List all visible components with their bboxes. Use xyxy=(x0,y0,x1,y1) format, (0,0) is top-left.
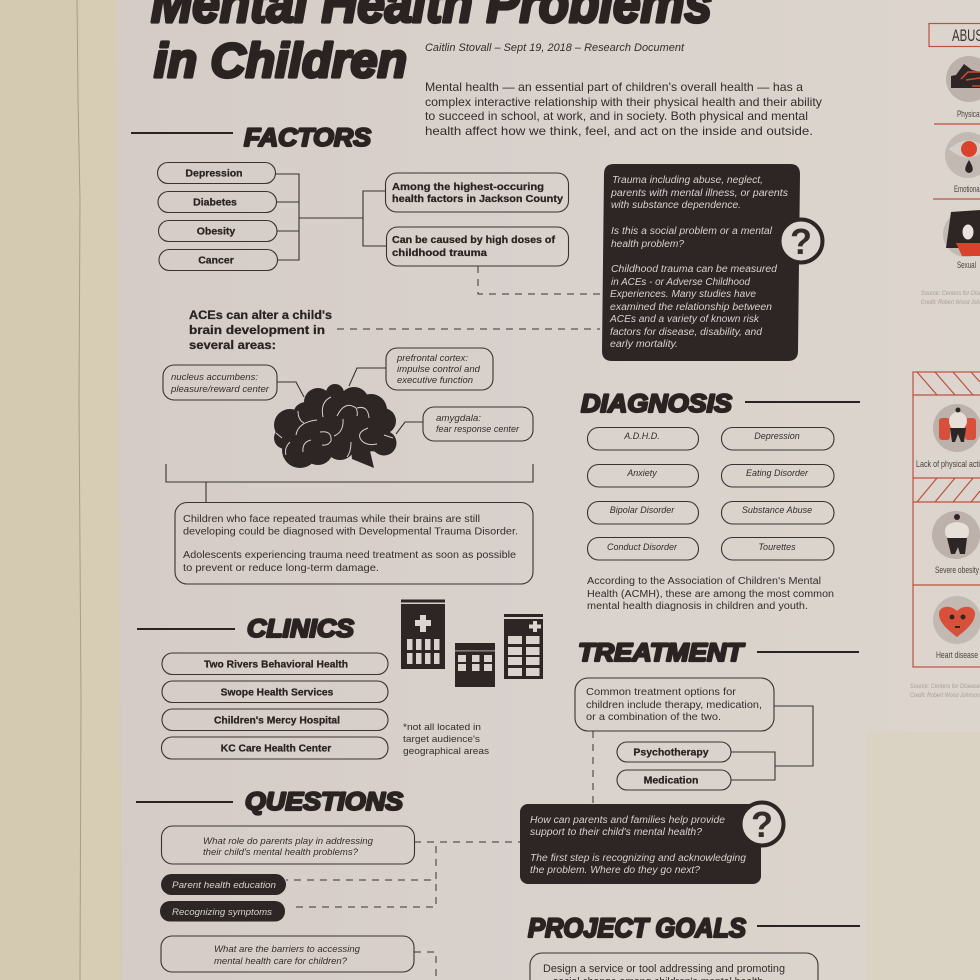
panel: trauma: examined the relationship between xyxy=(610,302,772,313)
factor pills: Depression xyxy=(185,168,243,180)
intro paragraph: health affect how we think, feel, and act on the inside and outside. xyxy=(425,124,813,138)
icon: physical abuse xyxy=(946,56,980,102)
brain label: nucleus accumbens: nucleus accumbens: xyxy=(171,372,258,382)
lower right wall patch xyxy=(866,732,980,980)
diagnosis pills: Conduct Disorder xyxy=(607,542,678,552)
treatment pills: Medication xyxy=(644,774,698,786)
clinic pills: Two Rivers Behavioral Health xyxy=(204,660,348,670)
diagnosis pills: A.D.H.D. xyxy=(623,431,660,441)
panel: developmental trauma xyxy=(175,502,533,584)
panel: trauma: health problem? xyxy=(611,239,685,250)
brain label: amygdala: fear response center xyxy=(436,424,520,434)
treatment connectors xyxy=(731,706,813,780)
diagnosis note xyxy=(587,576,834,612)
diagnosis pills: Bipolar Disorder xyxy=(610,505,675,515)
pill: recognizing symptoms: Recognizing symptoms xyxy=(172,907,272,918)
clinics footnote xyxy=(403,722,489,757)
icon: building large xyxy=(401,600,445,669)
panel: trauma: with substance dependence. xyxy=(611,200,741,211)
diagnosis pills: Tourettes xyxy=(758,542,796,552)
diagnosis pills: Depression xyxy=(754,431,800,441)
treatment description: Common treatment options for xyxy=(586,687,737,698)
intro paragraph: Mental health — an essential part of children's overall health — has a xyxy=(425,80,803,94)
icon: question mark: ? xyxy=(790,221,812,262)
bracket xyxy=(166,464,533,503)
brain label: amygdala xyxy=(396,407,533,441)
icon: question mark xyxy=(740,802,784,846)
panel: trauma: Is this a social problem or a mental xyxy=(611,226,773,237)
icon: question mark xyxy=(780,220,822,262)
icon: building small xyxy=(455,643,495,687)
callout: childhood trauma: Can be caused by high doses of xyxy=(392,235,556,246)
icon: lack of physical activity xyxy=(933,404,980,452)
ACEs statement: ACEs can alter a child's xyxy=(189,308,332,322)
icon: severe obesity xyxy=(932,511,980,559)
panel: trauma: in ACEs - or Adverse Childhood xyxy=(611,277,751,288)
brain label: prefrontal cortex: impulse control and xyxy=(397,364,481,374)
source credit xyxy=(910,684,980,699)
panel: trauma: early mortality. xyxy=(610,339,678,350)
panel: trauma: Childhood trauma can be measured xyxy=(611,264,778,275)
brain label: prefrontal cortex: prefrontal cortex: xyxy=(396,353,468,363)
dashed link: treatment to questions panel xyxy=(592,731,594,803)
intro paragraph xyxy=(425,80,822,138)
byline: Caitlin Stovall – Sept 19, 2018 – Research Document xyxy=(425,42,685,54)
clinic pills xyxy=(162,653,388,759)
diagnosis note: According to the Association of Children's Mental xyxy=(587,576,821,587)
dashed links to trauma panel xyxy=(337,266,600,329)
clinic pills: Children's Mercy Hospital xyxy=(214,716,340,726)
question dashed connectors xyxy=(286,842,520,980)
clinics footnote: geographical areas xyxy=(403,746,489,757)
heading: factors: FACTORS xyxy=(244,124,371,152)
intro paragraph: to succeed in school, at work, and in society. Both physical and mental xyxy=(425,109,808,123)
side poster: risk outcomes xyxy=(910,372,980,699)
intro paragraph: complex interactive relationship with their physical health and their ability xyxy=(425,95,822,109)
panel: project goals xyxy=(530,953,818,980)
panel: developmental trauma: Children who face repeated traumas while their brains are still xyxy=(183,514,480,525)
question box: parents xyxy=(162,826,414,864)
heading: clinics: CLINICS xyxy=(247,615,354,643)
treatment description: children include therapy, medication, xyxy=(586,700,762,711)
diagnosis pills: Substance Abuse xyxy=(742,505,812,515)
clinics footnote: target audience's xyxy=(403,734,480,745)
icon: brain xyxy=(274,384,396,468)
source credit xyxy=(921,291,980,306)
factor pills xyxy=(158,162,278,270)
panel: family support: How can parents and families help provide xyxy=(530,815,726,826)
panel: project goals: Design a service or tool addressing and promoting xyxy=(543,963,785,975)
panel: trauma: Trauma including abuse, neglect, xyxy=(612,175,763,186)
question box: parents: their child's mental health problems? xyxy=(203,847,359,857)
panel: developmental trauma: developing could be diagnosed with Developmental Trauma Disorder. xyxy=(183,526,518,538)
pill: recognizing symptoms xyxy=(160,901,285,922)
question box: barriers: What are the barriers to accessing xyxy=(214,944,361,954)
brain label: nucleus accumbens xyxy=(163,365,304,400)
panel: trauma: ACEs and a variety of known risk xyxy=(609,314,760,325)
callout: childhood trauma xyxy=(386,227,568,266)
diagnosis pills xyxy=(588,428,834,560)
panel: trauma: factors for disease, disability, and xyxy=(610,327,763,338)
panel: developmental trauma: to prevent or reduce long-term damage. xyxy=(183,563,379,574)
brain label: nucleus accumbens: pleasure/reward center xyxy=(170,384,270,394)
callout: childhood trauma: childhood trauma xyxy=(392,248,487,259)
factor pills: Cancer xyxy=(198,254,234,266)
heading: project goals: PROJECT GOALS xyxy=(528,913,746,943)
treatment description: or a combination of the two. xyxy=(586,712,721,723)
panel: family support: The first step is recognizing and acknowledging xyxy=(530,853,747,864)
brain label: prefrontal cortex: executive function xyxy=(397,375,473,385)
title: in Children xyxy=(154,35,407,88)
panel: family support: support to their child's mental health? xyxy=(530,827,703,838)
callout: highest factors: health factors in Jackson County xyxy=(392,194,563,205)
question box: barriers xyxy=(161,936,414,972)
diagnosis pills: Anxiety xyxy=(626,468,657,478)
heading: diagnosis: DIAGNOSIS xyxy=(581,390,732,418)
factor connectors xyxy=(276,174,386,260)
ACEs statement: several areas: xyxy=(189,338,276,352)
treatment pills xyxy=(617,742,731,790)
diagnosis note: Health (ACMH), these are among the most common xyxy=(587,589,834,600)
panel: trauma: Experiences. Many studies have xyxy=(610,289,757,300)
treatment pills: Psychotherapy xyxy=(633,746,709,758)
icon: sexual abuse xyxy=(943,210,980,257)
diagnosis note: mental health diagnosis in children and youth. xyxy=(587,601,808,612)
title xyxy=(151,0,712,88)
diagnosis pills: Eating Disorder xyxy=(746,468,809,478)
factor pills: Obesity xyxy=(197,226,235,238)
panel: trauma: parents with mental illness, or parents xyxy=(610,188,788,199)
clinics footnote: *not all located in xyxy=(403,722,481,733)
abuse header xyxy=(929,24,980,46)
icon: heart disease xyxy=(933,596,980,644)
factor pills: Diabetes xyxy=(193,196,237,208)
treatment description xyxy=(575,678,774,731)
question box: barriers: mental health care for children? xyxy=(214,956,348,966)
icon: emotional abuse xyxy=(945,132,980,178)
brain label: amygdala: amygdala: xyxy=(436,413,481,423)
pill: parent health education xyxy=(161,874,286,895)
panel: family support xyxy=(520,804,761,884)
callout: highest factors xyxy=(386,173,568,212)
brain label: prefrontal cortex xyxy=(349,348,493,390)
panel: developmental trauma: Adolescents experiencing trauma need treatment as soon as possible xyxy=(183,550,516,561)
clinic pills: KC Care Health Center xyxy=(221,744,331,754)
side poster: abuse xyxy=(921,24,980,306)
clinic pills: Swope Health Services xyxy=(221,688,334,698)
icon: question mark: ? xyxy=(751,804,773,845)
pill: parent health education: Parent health education xyxy=(172,880,276,891)
heading: questions: QUESTIONS xyxy=(245,788,403,816)
ACEs statement xyxy=(189,308,332,352)
icon: building medium xyxy=(504,614,543,679)
question box: parents: What role do parents play in addressing xyxy=(203,836,374,846)
heading: treatment: TREATMENT xyxy=(578,639,746,667)
callout: highest factors: Among the highest-occuring xyxy=(392,182,544,193)
ACEs statement: brain development in xyxy=(189,323,325,337)
panel: family support: the problem. Where do they go next? xyxy=(530,865,701,876)
panel: trauma xyxy=(602,164,800,361)
